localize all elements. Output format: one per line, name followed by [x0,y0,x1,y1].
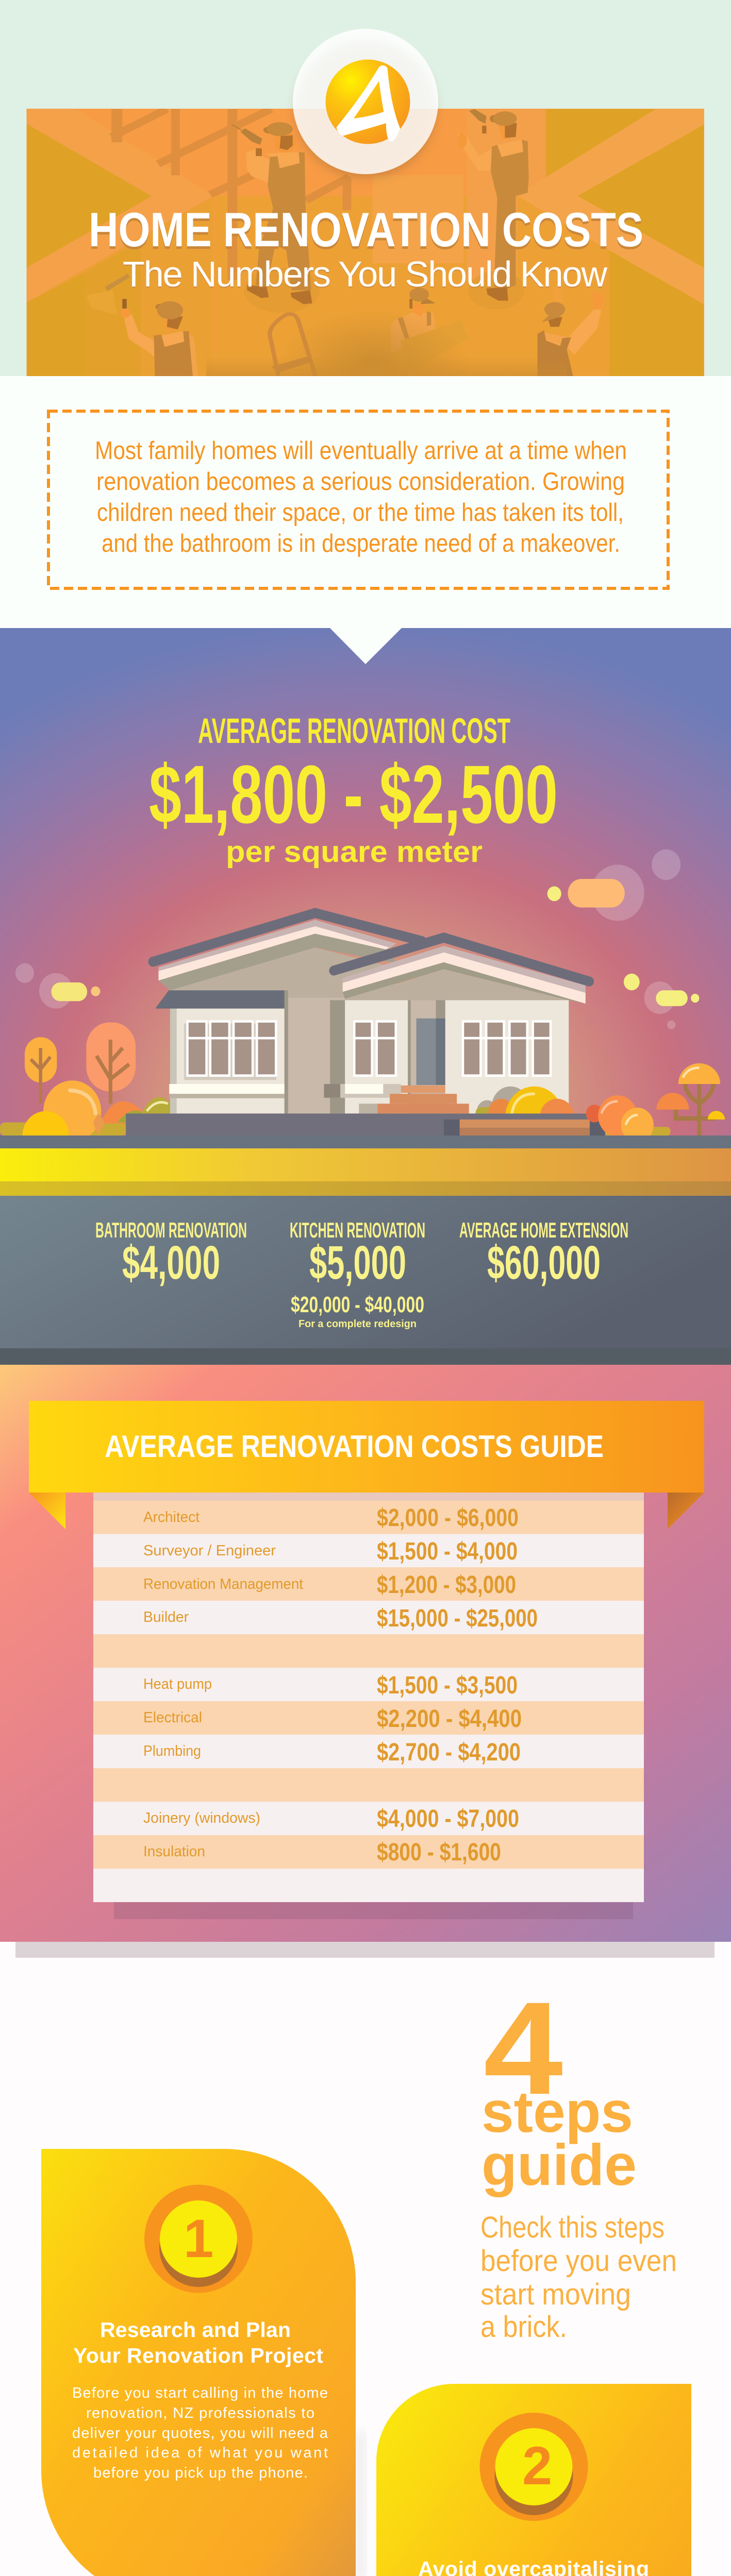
row: joinery [143,1805,519,1833]
house scene [0,850,725,1147]
title: HOME RENOVATION COSTS [89,202,643,257]
section bottom shadow [15,1942,715,1958]
row: insulation: $800 - $1,600 [377,1839,501,1866]
intro text: renovation becomes a serious consideration. Growing [96,468,625,496]
4 steps guide heading: Check this steps [480,2211,664,2244]
badge 1 [144,2184,253,2293]
row: joinery: $4,000 - $7,000 [377,1805,519,1833]
stat: kitchen: $5,000 [309,1236,406,1289]
step card 1: detailed idea of what you want [72,2445,328,2461]
4 steps guide heading: start moving [480,2278,631,2311]
cost stats panel [0,1196,731,1365]
stat: kitchen: For a complete redesign [298,1318,417,1330]
row: electrical: $2,200 - $4,400 [377,1705,522,1733]
row: plumbing: $2,700 - $4,200 [377,1739,521,1766]
4 steps guide heading: a brick. [480,2310,567,2344]
4 steps guide heading: steps [481,2079,633,2144]
windows [184,1021,551,1080]
row: architect [143,1504,519,1532]
row: heat pump: Heat pump [143,1676,212,1692]
row: plumbing: Plumbing [143,1743,201,1759]
clouds [15,850,699,1029]
4 steps guide heading: 4 [484,1975,563,2122]
average renovation cost headline [149,711,558,869]
stat: kitchen: $20,000 - $40,000 [291,1292,424,1317]
right garden [586,1063,725,1142]
average renovation cost headline: AVERAGE RENOVATION COST [198,711,510,751]
intro text: children need their space, or the time has taken its toll, [97,499,624,527]
4 steps guide heading [480,1975,677,2344]
row: electrical: Electrical [143,1709,202,1726]
row: joinery: Joinery (windows) [143,1810,260,1826]
intro text [95,437,627,557]
row: insulation [143,1839,501,1866]
step card 1: Your Renovation Project [73,2344,323,2367]
intro panel [0,376,731,629]
worker: carrying planks [391,287,435,353]
banner right half [366,109,706,377]
stat: kitchen [290,1218,425,1330]
costs guide section background [0,1365,731,1942]
badge 2: 2 [522,2436,552,2496]
step card 1 [41,2149,356,2576]
stairs [324,1084,469,1113]
logo badge top [293,29,438,177]
stat: extension [459,1218,628,1289]
badge 2 [479,2413,588,2521]
worker: painting bottom left [87,274,198,377]
trees left [0,1022,170,1142]
row: surveyor [143,1538,518,1565]
right gable [345,969,569,1005]
road bands [0,1136,731,1196]
main house body [153,913,589,1113]
worker: arms raised [538,287,604,377]
header mint background [0,0,731,376]
ribbon heading [29,1401,704,1529]
stat: bathroom: BATHROOM RENOVATION [95,1218,247,1242]
badge 1: 1 [184,2209,213,2269]
step card 1: deliver your quotes, you will need a [72,2425,328,2442]
row: builder [143,1605,538,1632]
card shadows [141,2432,588,2576]
step card 1: before you pick up the phone. [93,2465,308,2481]
row: heat pump: $1,500 - $3,500 [377,1672,518,1699]
row: electrical [143,1705,522,1733]
average renovation cost headline: per square meter [226,835,483,869]
row: renovation management: Renovation Management [143,1576,303,1592]
ladder [270,314,315,377]
row: architect: $2,000 - $6,000 [377,1504,519,1532]
intro text: Most family homes will eventually arrive at a time when [95,437,627,465]
step card 2 [376,2384,691,2576]
row: heat pump [143,1672,518,1699]
4 steps guide heading: guide [481,2132,637,2197]
intro text: and the bathroom is in desperate need of a makeover. [102,530,620,557]
step card 1: Research and Plan [100,2318,291,2342]
row: surveyor: Surveyor / Engineer [143,1543,276,1559]
row: builder: $15,000 - $25,000 [377,1605,538,1632]
costs table [93,1493,644,1919]
row: insulation: Insulation [143,1843,205,1860]
title: HOME RENOVATION COSTS [89,205,643,259]
base and planter [126,1113,605,1136]
row: plumbing [143,1739,521,1766]
row: architect: Architect [143,1509,200,1526]
title: The Numbers You Should Know [123,255,607,295]
bushes near planter [475,1087,574,1147]
step card 1: Before you start calling in the home [72,2385,328,2401]
row: renovation management: $1,200 - $3,000 [377,1571,516,1599]
4 steps guide heading: before you even [480,2244,677,2278]
banner illustration: construction workers [27,109,704,376]
worker: drilling top right [457,109,529,301]
title: The Numbers You Should Know [123,254,607,294]
ribbon heading: AVERAGE RENOVATION COSTS GUIDE [105,1429,604,1464]
stat: kitchen: KITCHEN RENOVATION [290,1218,425,1242]
title [89,202,643,295]
stat: bathroom [95,1218,247,1289]
stat: extension: $60,000 [487,1236,601,1289]
row: surveyor: $1,500 - $4,000 [377,1538,518,1565]
stat: bathroom: $4,000 [122,1236,220,1289]
notch arrow [329,628,402,664]
sky background [0,628,731,1136]
worker: drilling top left [232,122,312,304]
step card 1: renovation, NZ professionals to [86,2405,314,2421]
average renovation cost headline: $1,800 - $2,500 [149,748,558,840]
row: builder: Builder [143,1609,189,1625]
banner left half [27,109,351,377]
row: renovation management [143,1571,516,1599]
